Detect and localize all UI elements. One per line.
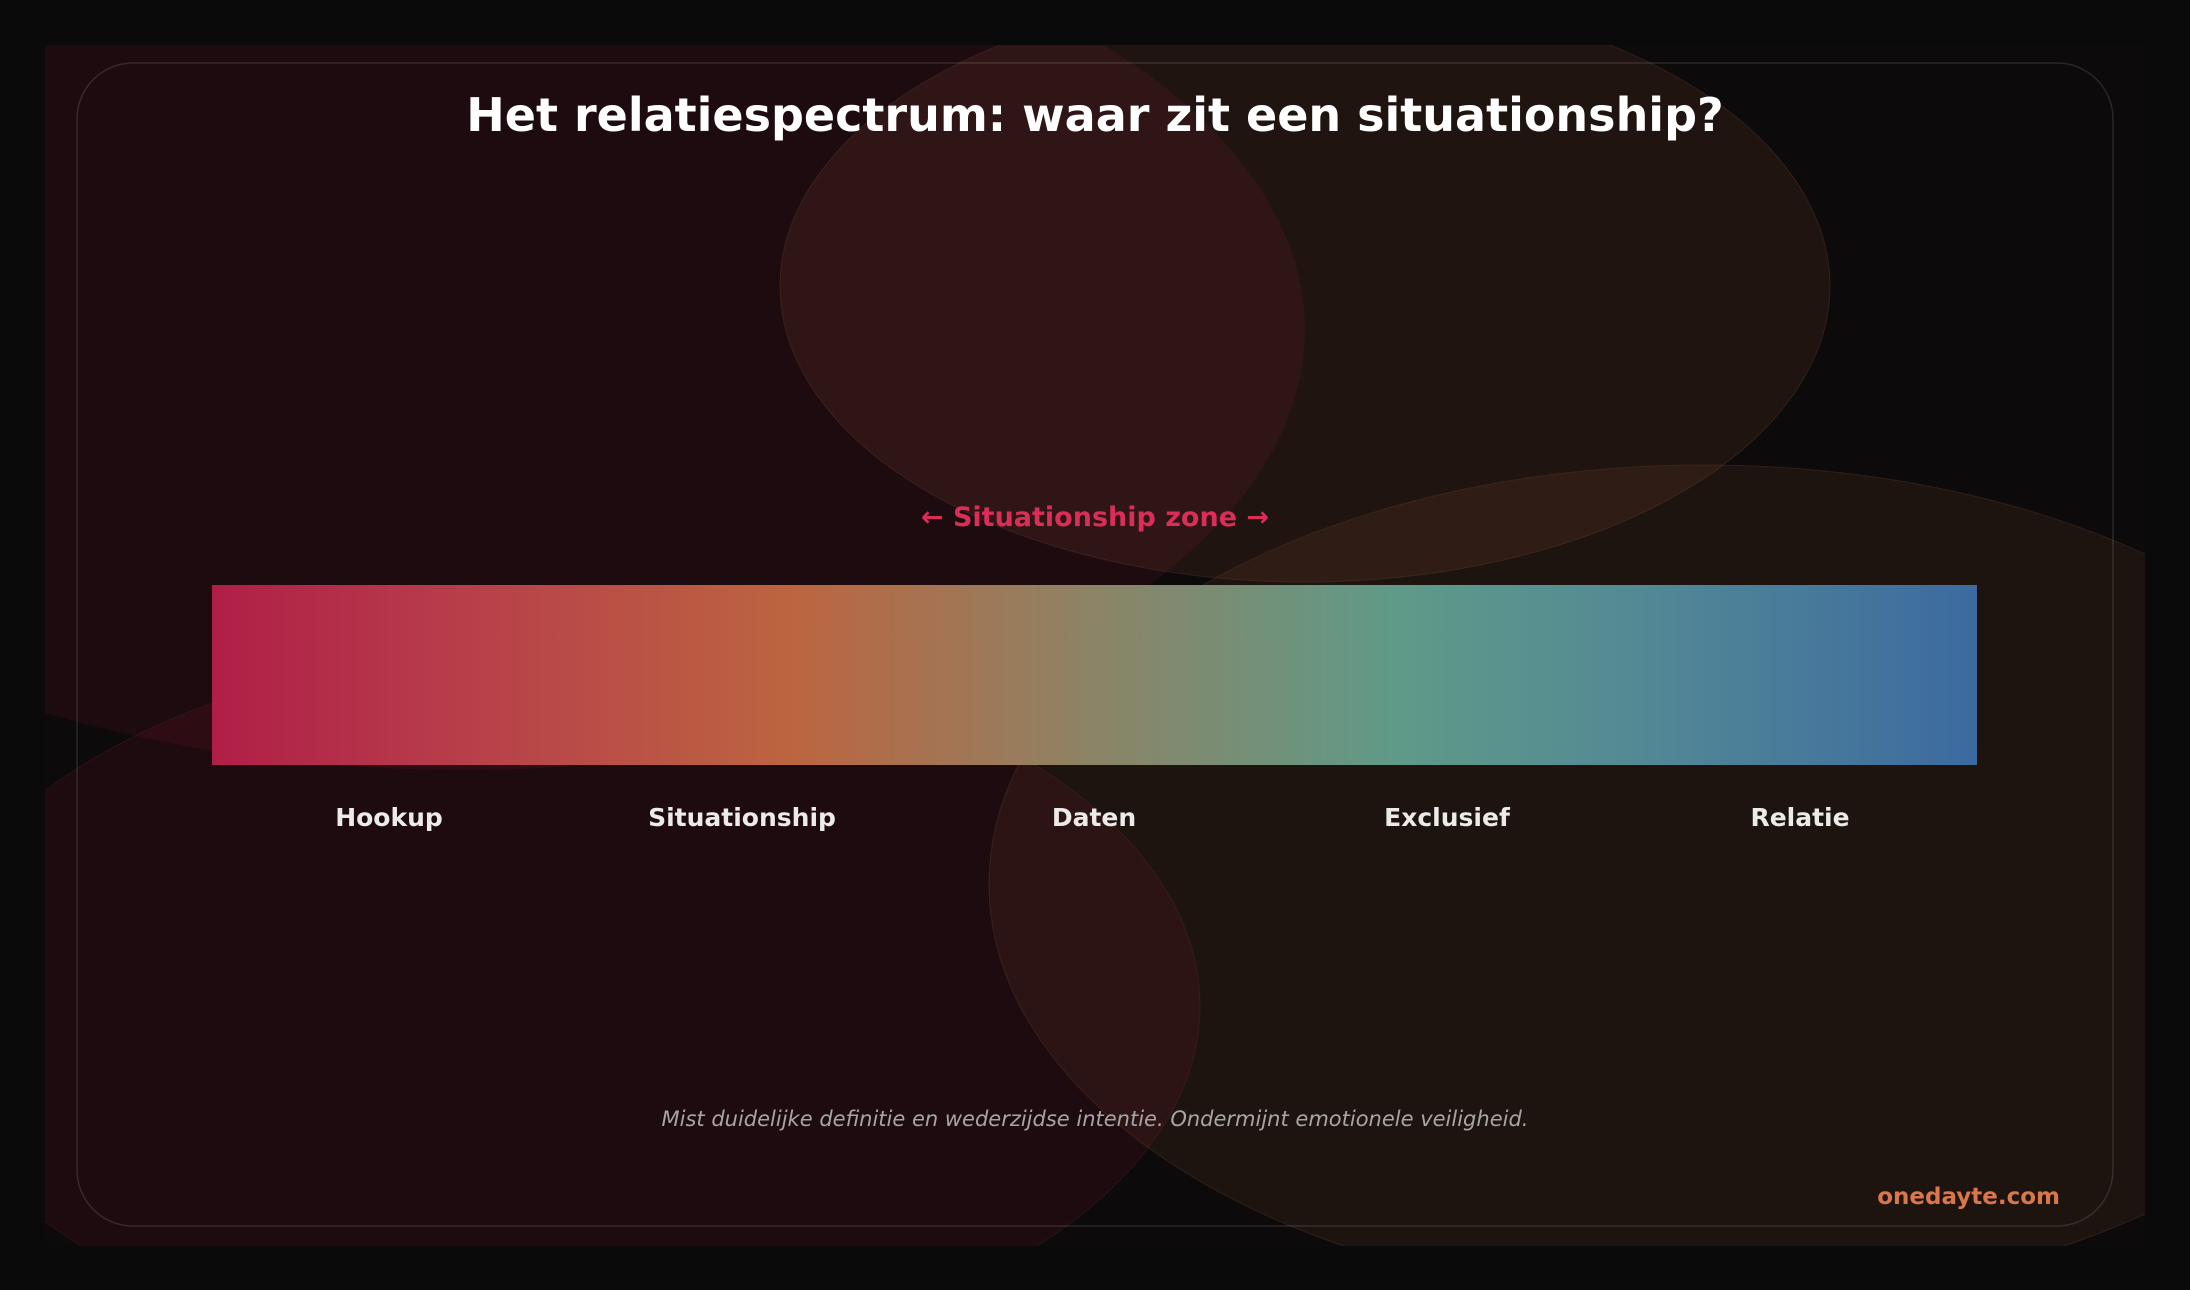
spectrum labels: Hookup [335, 803, 443, 832]
spectrum labels [335, 803, 1850, 832]
title: Het relatiespectrum: waar zit een situationship? [466, 88, 1724, 142]
spectrum labels: Daten [1052, 803, 1136, 832]
brand: onedayte.com [1877, 1184, 2060, 1210]
spectrum labels: Situationship [648, 803, 836, 832]
spectrum labels: Relatie [1750, 803, 1850, 832]
spectrum labels: Exclusief [1384, 803, 1511, 832]
footnote: Mist duidelijke definitie en wederzijdse intentie. Ondermijnt emotionele veiligheid. [662, 1107, 1528, 1131]
zone label: ← Situationship zone → [921, 502, 1269, 533]
spectrum bar [212, 585, 1977, 765]
